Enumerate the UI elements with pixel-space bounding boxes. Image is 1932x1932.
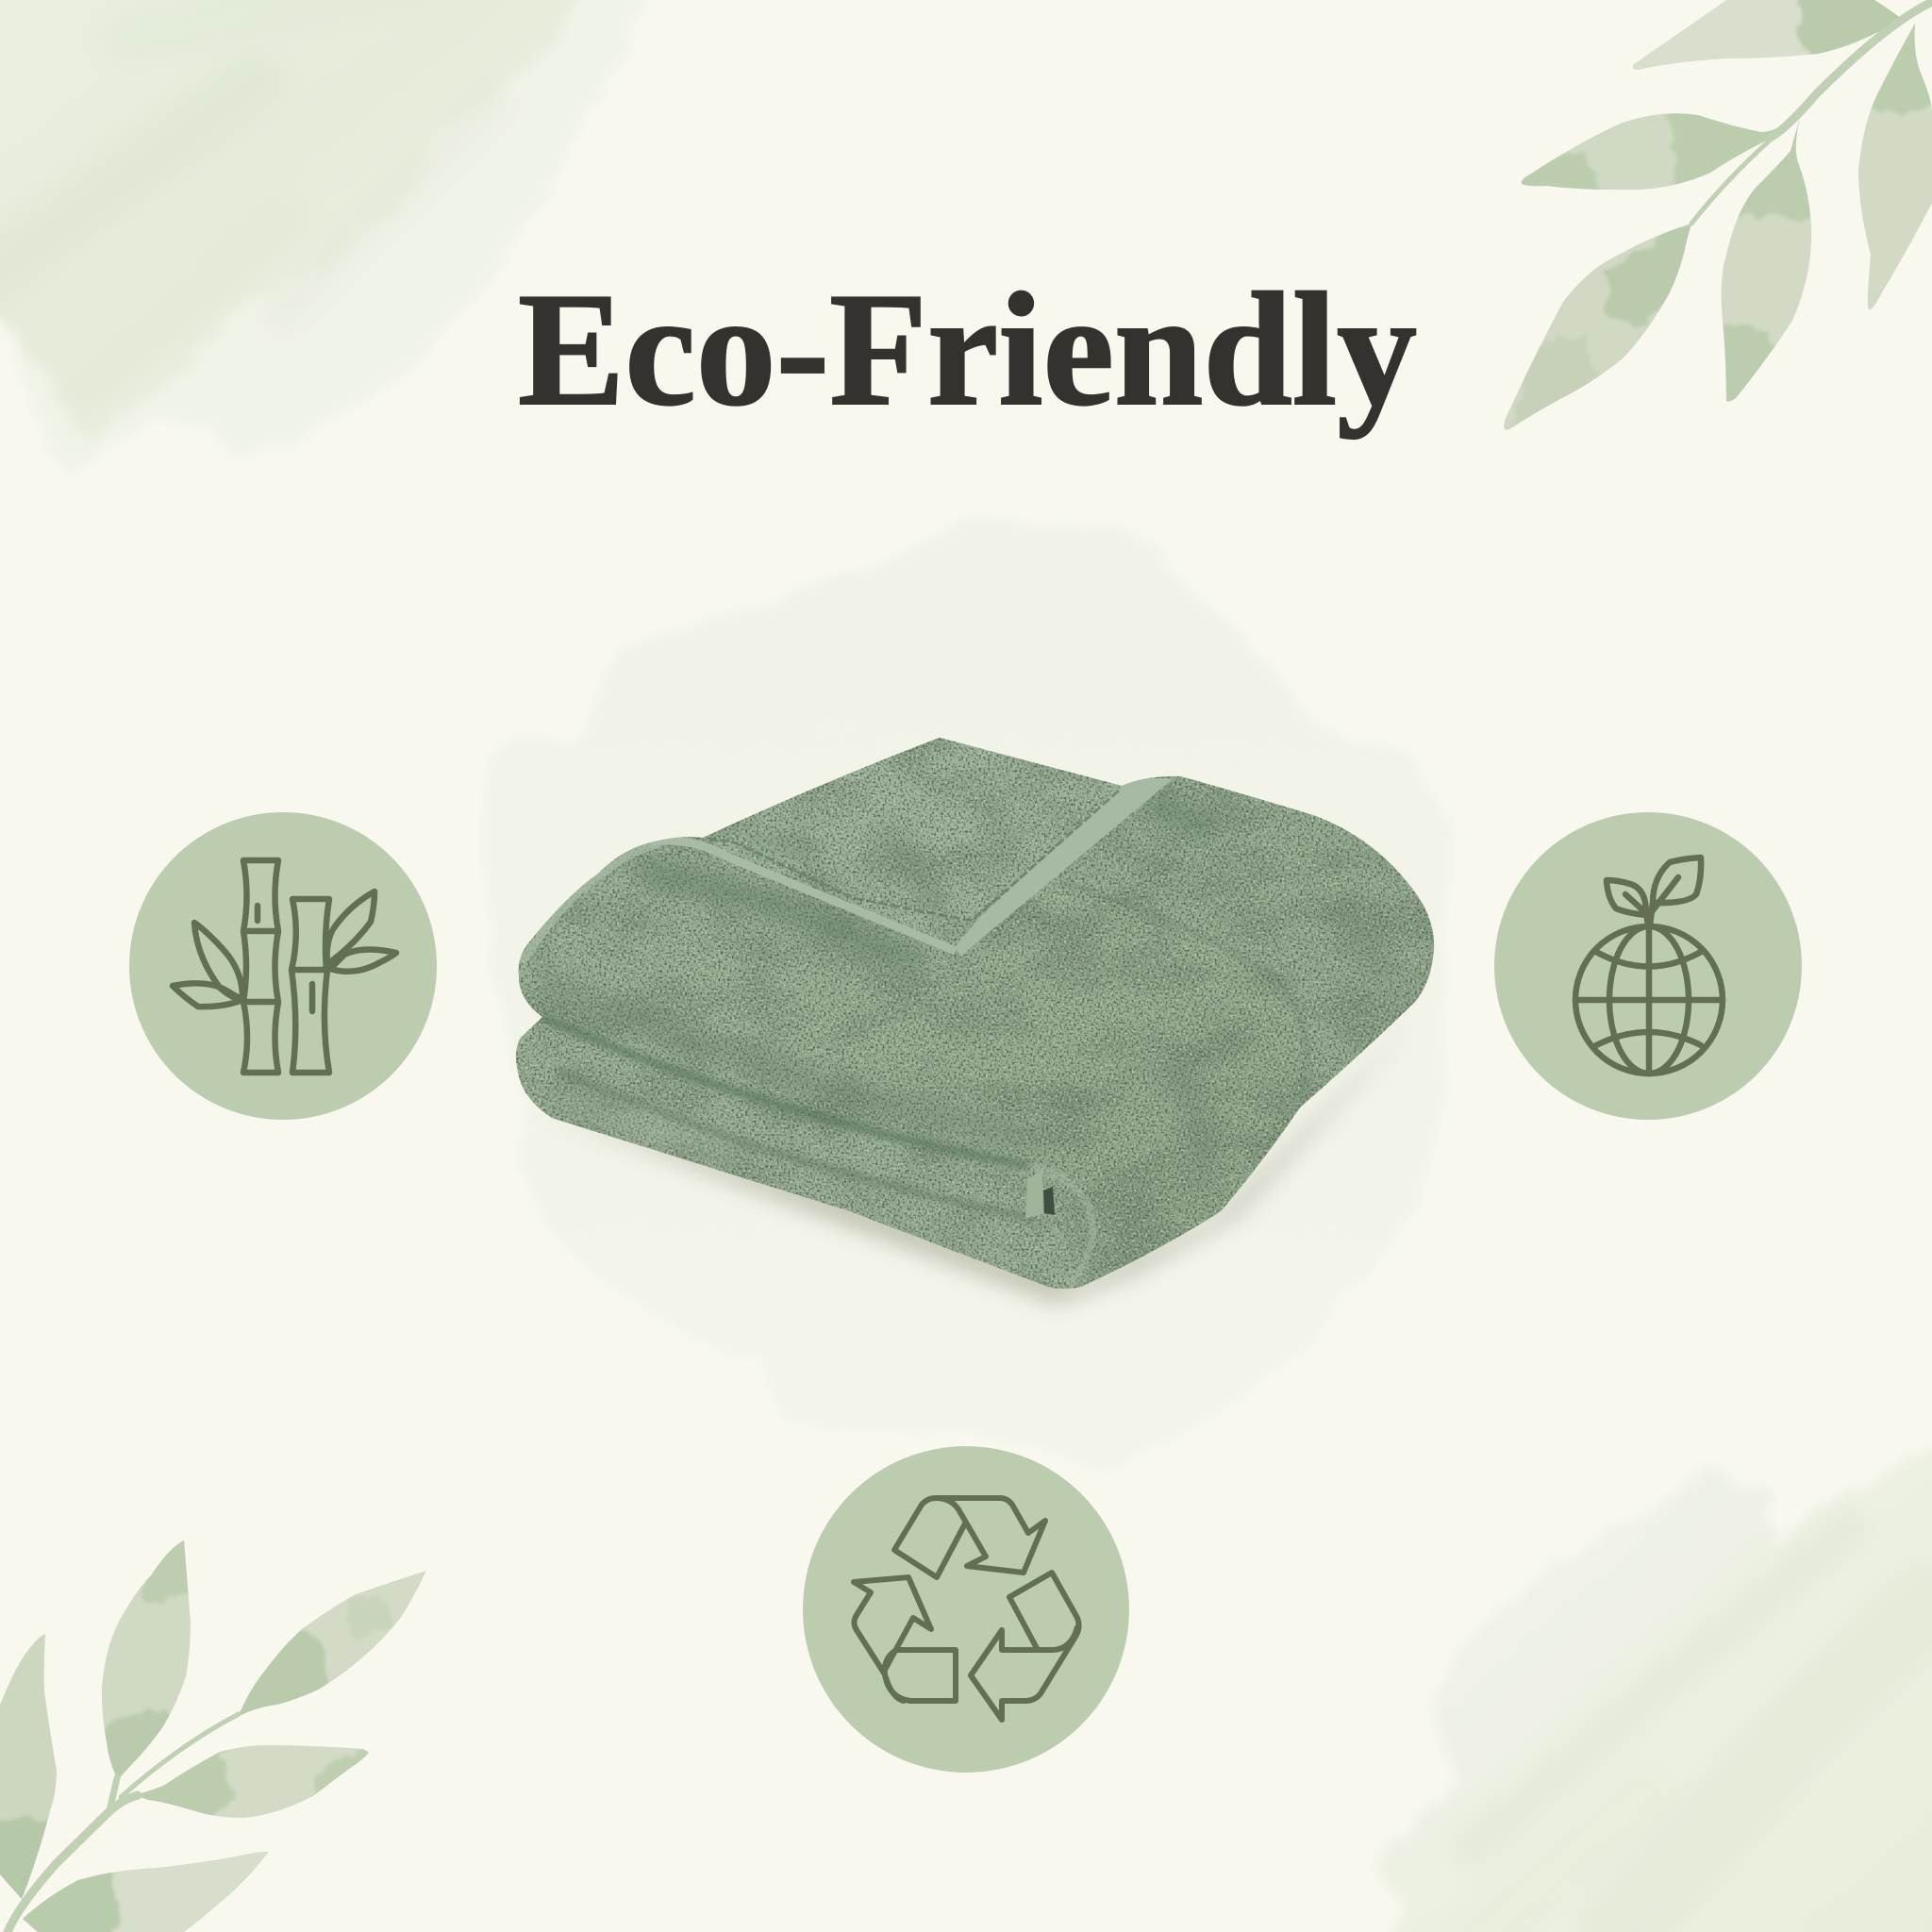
stem: [8, 1714, 239, 1932]
folded towel: [516, 738, 1434, 1289]
leaf: top: [1632, 0, 1899, 70]
watercolor blob behind towel: [479, 517, 1454, 1472]
watercolor wash: top left: [0, 0, 651, 472]
leaf: lower left: [1500, 212, 1698, 434]
short bamboo stalk: [291, 899, 329, 1073]
towel flap: [708, 738, 1122, 955]
flap border, right edge: [955, 778, 1173, 956]
leaf: middle: [1721, 119, 1811, 402]
tall bamboo stalk: [243, 860, 278, 1073]
leaf: upper right: [240, 1571, 426, 1715]
towel end slot: [1025, 1170, 1043, 1219]
leaf: upper left: [1521, 113, 1776, 191]
towel lower fold: [516, 1017, 1081, 1289]
title: Eco-Friendly: [518, 260, 1417, 440]
leaf: right: [1858, 24, 1932, 309]
watercolor wash: bottom right: [1373, 1448, 1932, 1932]
flap border, lower edge: [651, 841, 956, 951]
leaf: far left: [0, 1634, 57, 1899]
leaf: right: [142, 1745, 368, 1818]
leaf sprig: bottom left: [0, 1538, 429, 1932]
leaf sprig: top right: [1500, 0, 1932, 434]
globe: [1575, 926, 1723, 1074]
sprout leaves: [1607, 880, 1648, 925]
icon badge: recycling arrows: [803, 1446, 1129, 1773]
right arrow: [971, 1573, 1079, 1720]
lower fold highlight: [566, 1099, 736, 1156]
towel contact shadow: [538, 1019, 1415, 1304]
stem: [1691, 2, 1932, 224]
flap inner stitch line: [709, 791, 1119, 921]
lit left edge: [522, 844, 660, 962]
left arrow: [854, 1577, 956, 1701]
towel top fold: [519, 842, 1307, 1287]
shading: seam and fold shadows: [542, 802, 1387, 1264]
top arrow: [894, 1498, 1045, 1577]
bamboo leaves: [194, 923, 242, 1000]
leaf: bottom: [9, 1849, 274, 1932]
lit front-edge roll: [1033, 1166, 1092, 1285]
leaf: tall middle: [102, 1541, 191, 1777]
icon badge: bamboo: [129, 812, 437, 1120]
icon badge: globe with sprout: [1494, 812, 1802, 1120]
towel silhouette and back panel: [516, 738, 1434, 1289]
